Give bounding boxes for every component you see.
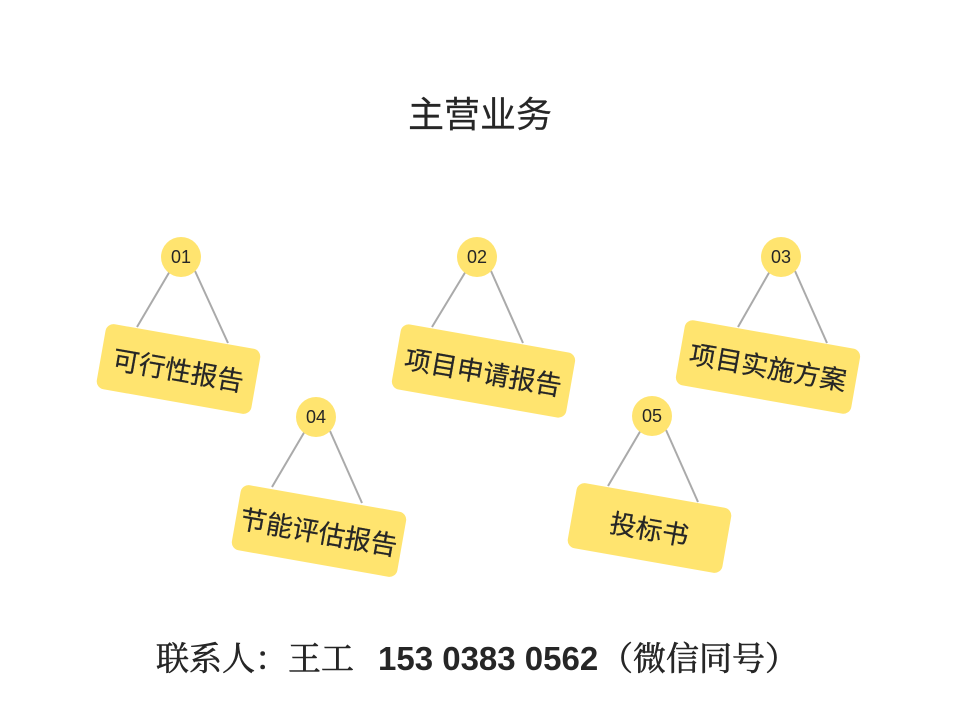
item 01 number xyxy=(161,237,201,277)
item 03 number: 03 xyxy=(771,247,791,267)
contact line: （微信同号） xyxy=(600,642,798,678)
item 01 sign xyxy=(95,323,262,415)
item 03 sign xyxy=(675,319,861,415)
title: 主营业务 xyxy=(408,94,552,135)
item 02 number: 02 xyxy=(467,247,487,267)
item 02 sign xyxy=(391,323,576,419)
item 01 sign: 可行性报告 xyxy=(110,345,246,397)
item 05 number xyxy=(632,396,672,436)
contact line: 联系人：王工 xyxy=(156,642,354,678)
item 01 number: 01 xyxy=(171,247,191,267)
item 04 sign xyxy=(231,484,407,578)
item 05 sign: 投标书 xyxy=(607,508,691,552)
item 02 number xyxy=(457,237,497,277)
item 05 number: 05 xyxy=(642,406,662,426)
item 03 number xyxy=(761,237,801,277)
item 04 number xyxy=(296,397,336,437)
item 05 sign xyxy=(566,482,733,574)
item 04 sign: 节能评估报告 xyxy=(238,504,400,562)
item 03 sign: 项目实施方案 xyxy=(687,339,849,397)
item 02 sign: 项目申请报告 xyxy=(402,344,564,402)
contact line: 153 0383 0562 xyxy=(378,640,598,677)
item 04 number: 04 xyxy=(306,407,326,427)
